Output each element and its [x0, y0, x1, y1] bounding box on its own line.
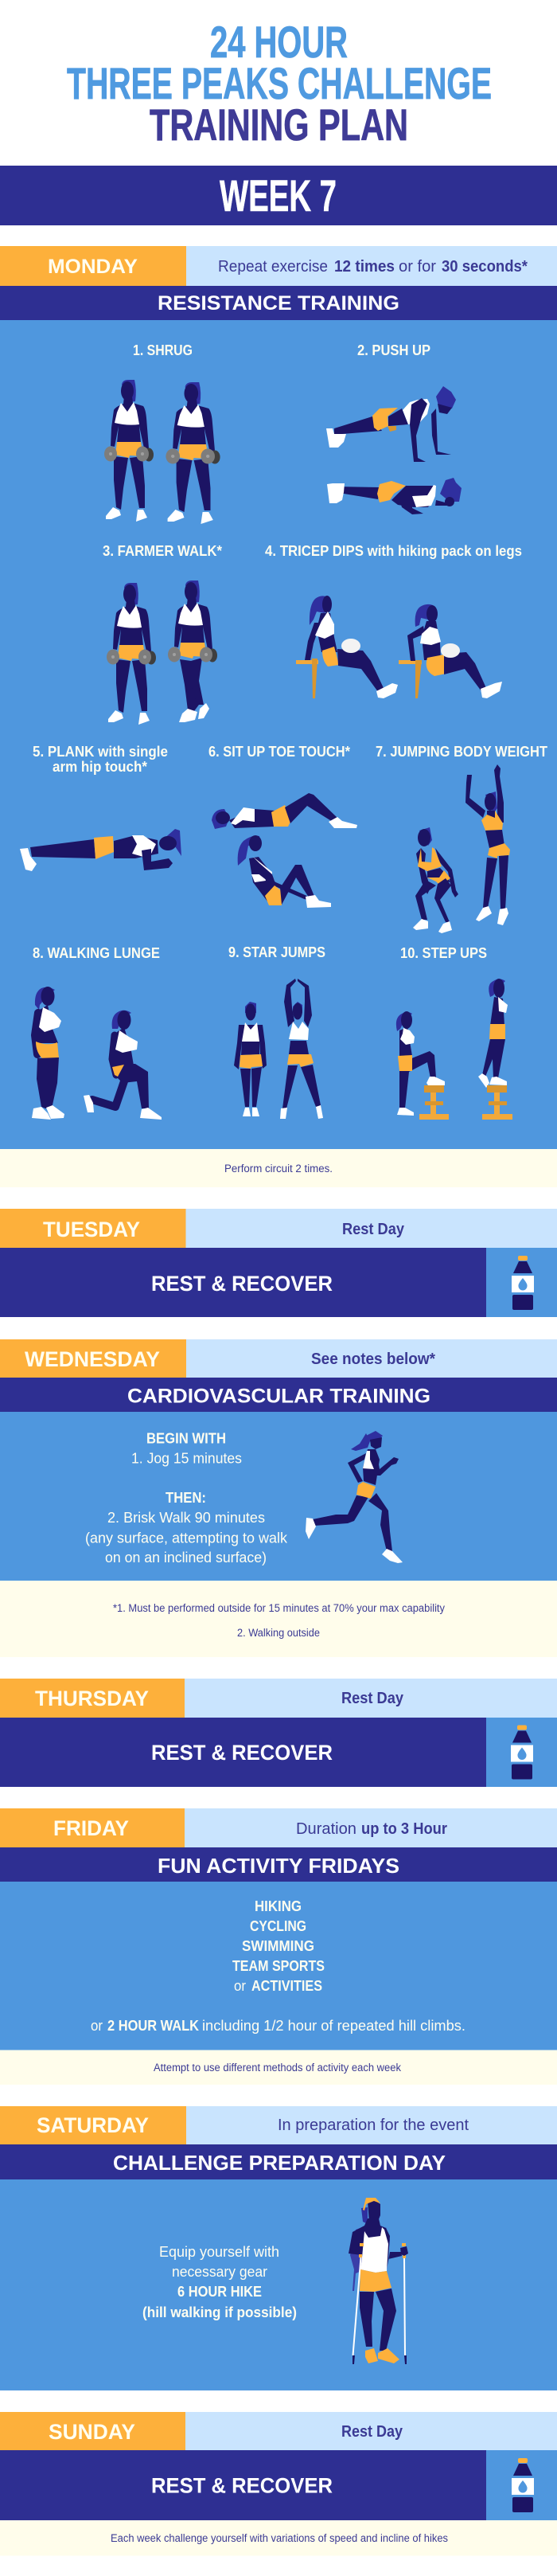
exercises panel: [0, 320, 557, 1149]
label: star jumps: 9. STAR JUMPS: [228, 944, 325, 960]
rest and recover band: REST & RECOVER: [151, 1272, 333, 1296]
friday day tab: FRIDAY: [53, 1816, 129, 1840]
figure: sit up toe touch: [212, 793, 357, 908]
sunday note: Rest Day: [341, 2423, 403, 2441]
panel: saturday: [0, 2106, 557, 2390]
friday note: [0, 2050, 557, 2085]
figure: walking lunge: [32, 987, 162, 1120]
sunday day tab: [0, 2412, 185, 2450]
friday duration: up to 3 Hour: [361, 1820, 447, 1838]
activities list: ACTIVITIES: [251, 1978, 322, 1994]
cardio instructions: on on an inclined surface): [105, 1550, 267, 1566]
figure: tricep dips: [296, 596, 502, 698]
thursday note: [185, 1679, 557, 1718]
cardio panel: [0, 1412, 557, 1581]
figure: star jumps: [234, 979, 323, 1119]
fun activity fridays heading: [0, 1847, 557, 1882]
figure: jumping body weight: [413, 764, 510, 933]
rest and recover band: REST & RECOVER: [151, 2473, 333, 2497]
wednesday day tab: WEDNESDAY: [25, 1347, 160, 1371]
thursday day tab: [0, 1679, 185, 1718]
icon: water bottle: [486, 2450, 557, 2520]
week banner: WEEK 7: [220, 170, 337, 221]
rest and recover band: [0, 1248, 486, 1317]
icon: water bottle: [486, 1248, 557, 1317]
cardio instructions: BEGIN WITH: [146, 1430, 226, 1446]
tuesday note: [186, 1209, 557, 1248]
sunday note footer: [0, 2520, 557, 2556]
friday duration: [185, 1808, 557, 1847]
figure: shrug: [104, 380, 220, 524]
figure: runner: [306, 1431, 403, 1563]
label: plank: [33, 744, 168, 775]
activities list: HIKING: [255, 1898, 302, 1914]
monday instruction: 12 times: [334, 258, 395, 276]
preparation instructions: (hill walking if possible): [142, 2304, 297, 2320]
saturday day tab: SATURDAY: [37, 2113, 149, 2137]
wednesday note: See notes below*: [311, 1351, 435, 1368]
friday duration: Duration: [296, 1820, 356, 1838]
cardio instructions: [85, 1430, 288, 1566]
cardio instructions: (any surface, attempting to walk: [85, 1530, 288, 1546]
label: sit up toe touch: 6. SIT UP TOE TOUCH*: [208, 744, 350, 760]
figure: push up: [326, 386, 462, 514]
monday instruction: Repeat exercise: [218, 258, 328, 276]
label: step ups: 10. STEP UPS: [400, 945, 487, 961]
cardio instructions: 1. Jog 15 minutes: [131, 1451, 242, 1467]
panel: friday: [0, 1808, 557, 2085]
monday instruction: 30 seconds*: [442, 258, 528, 276]
monday day tab: [0, 246, 186, 286]
label: plank: 5. PLANK with single: [33, 744, 168, 760]
label: shrug: 1. SHRUG: [133, 342, 193, 358]
label: walking lunge: 8. WALKING LUNGE: [33, 945, 160, 961]
wednesday footnotes: [0, 1581, 557, 1657]
tuesday note: Rest Day: [342, 1221, 405, 1238]
activities list: or: [234, 1978, 246, 1994]
monday note: [0, 1149, 557, 1187]
preparation panel: [0, 2179, 557, 2390]
wednesday footnotes: 2. Walking outside: [237, 1627, 320, 1639]
rest and recover band: [0, 2450, 486, 2520]
preparation instructions: [142, 2244, 297, 2320]
panel: tuesday: [0, 1209, 557, 1317]
cardiovascular training heading: CARDIOVASCULAR TRAINING: [127, 1386, 430, 1408]
panel: monday: [0, 246, 557, 1187]
cardiovascular training heading: [0, 1378, 557, 1412]
activities list: CYCLING: [250, 1918, 306, 1934]
preparation instructions: 6 HOUR HIKE: [177, 2284, 262, 2300]
rest and recover band: [0, 1718, 486, 1787]
sunday day tab: SUNDAY: [49, 2420, 135, 2444]
label: tricep dips: 4. TRICEP DIPS with hiking pack on legs: [265, 543, 522, 559]
walk alternative: 2 HOUR WALK: [107, 2018, 199, 2034]
challenge preparation day heading: CHALLENGE PREPARATION DAY: [113, 2151, 446, 2175]
rest and recover band: REST & RECOVER: [151, 1741, 333, 1765]
thursday note: Rest Day: [341, 1690, 404, 1707]
walk alternative: or: [91, 2018, 103, 2034]
label: plank: arm hip touch*: [53, 759, 147, 775]
activities list: SWIMMING: [242, 1938, 314, 1954]
figure: hiker: [349, 2198, 408, 2364]
week banner: [0, 166, 557, 225]
monday note: Perform circuit 2 times.: [224, 1163, 333, 1175]
thursday day tab: THURSDAY: [35, 1687, 149, 1710]
title: 24 HOUR: [210, 17, 348, 67]
monday instruction: or for: [399, 258, 436, 276]
panel: wednesday: [0, 1339, 557, 1657]
cardio instructions: THEN:: [166, 1490, 206, 1506]
tuesday day tab: [0, 1209, 186, 1248]
saturday note: [186, 2106, 557, 2144]
figure: farmer walk: [107, 580, 217, 725]
panel: sunday: [0, 2412, 557, 2556]
icon: water bottle: [486, 1718, 557, 1787]
walk alternative: including 1/2 hour of repeated hill climbs.: [202, 2018, 465, 2034]
cardio instructions: 2. Brisk Walk 90 minutes: [107, 1510, 265, 1526]
walk alternative: [91, 2018, 465, 2034]
title: [67, 17, 492, 150]
wednesday note: [186, 1339, 557, 1378]
wednesday day tab: [0, 1339, 186, 1378]
panel: thursday: [0, 1679, 557, 1787]
friday day tab: [0, 1808, 185, 1847]
fun activity fridays heading: FUN ACTIVITY FRIDAYS: [158, 1854, 399, 1878]
sunday note: [185, 2412, 557, 2450]
saturday note: In preparation for the event: [278, 2117, 469, 2134]
label: push up: 2. PUSH UP: [357, 342, 430, 358]
resistance training heading: RESISTANCE TRAINING: [158, 292, 399, 315]
friday note: Attempt to use different methods of activity each week: [154, 2062, 401, 2074]
figure: step ups: [396, 979, 512, 1120]
saturday day tab: [0, 2106, 186, 2144]
activities list: TEAM SPORTS: [232, 1958, 325, 1974]
figure: plank: [20, 829, 181, 871]
wednesday footnotes: *1. Must be performed outside for 15 minutes at 70% your max capability: [113, 1602, 445, 1614]
activities panel: [0, 1882, 557, 2050]
preparation instructions: Equip yourself with: [159, 2244, 279, 2260]
tuesday day tab: TUESDAY: [43, 1218, 140, 1241]
challenge preparation day heading: [0, 2144, 557, 2179]
sunday note footer: Each week challenge yourself with variations of speed and incline of hikes: [111, 2532, 448, 2544]
resistance training heading: [0, 286, 557, 320]
preparation instructions: necessary gear: [172, 2264, 267, 2280]
title: TRAINING PLAN: [150, 100, 408, 150]
monday day tab: MONDAY: [48, 256, 138, 278]
monday instruction: [186, 246, 557, 286]
activities list: [232, 1898, 325, 1994]
label: farmer walk: 3. FARMER WALK*: [103, 543, 222, 559]
